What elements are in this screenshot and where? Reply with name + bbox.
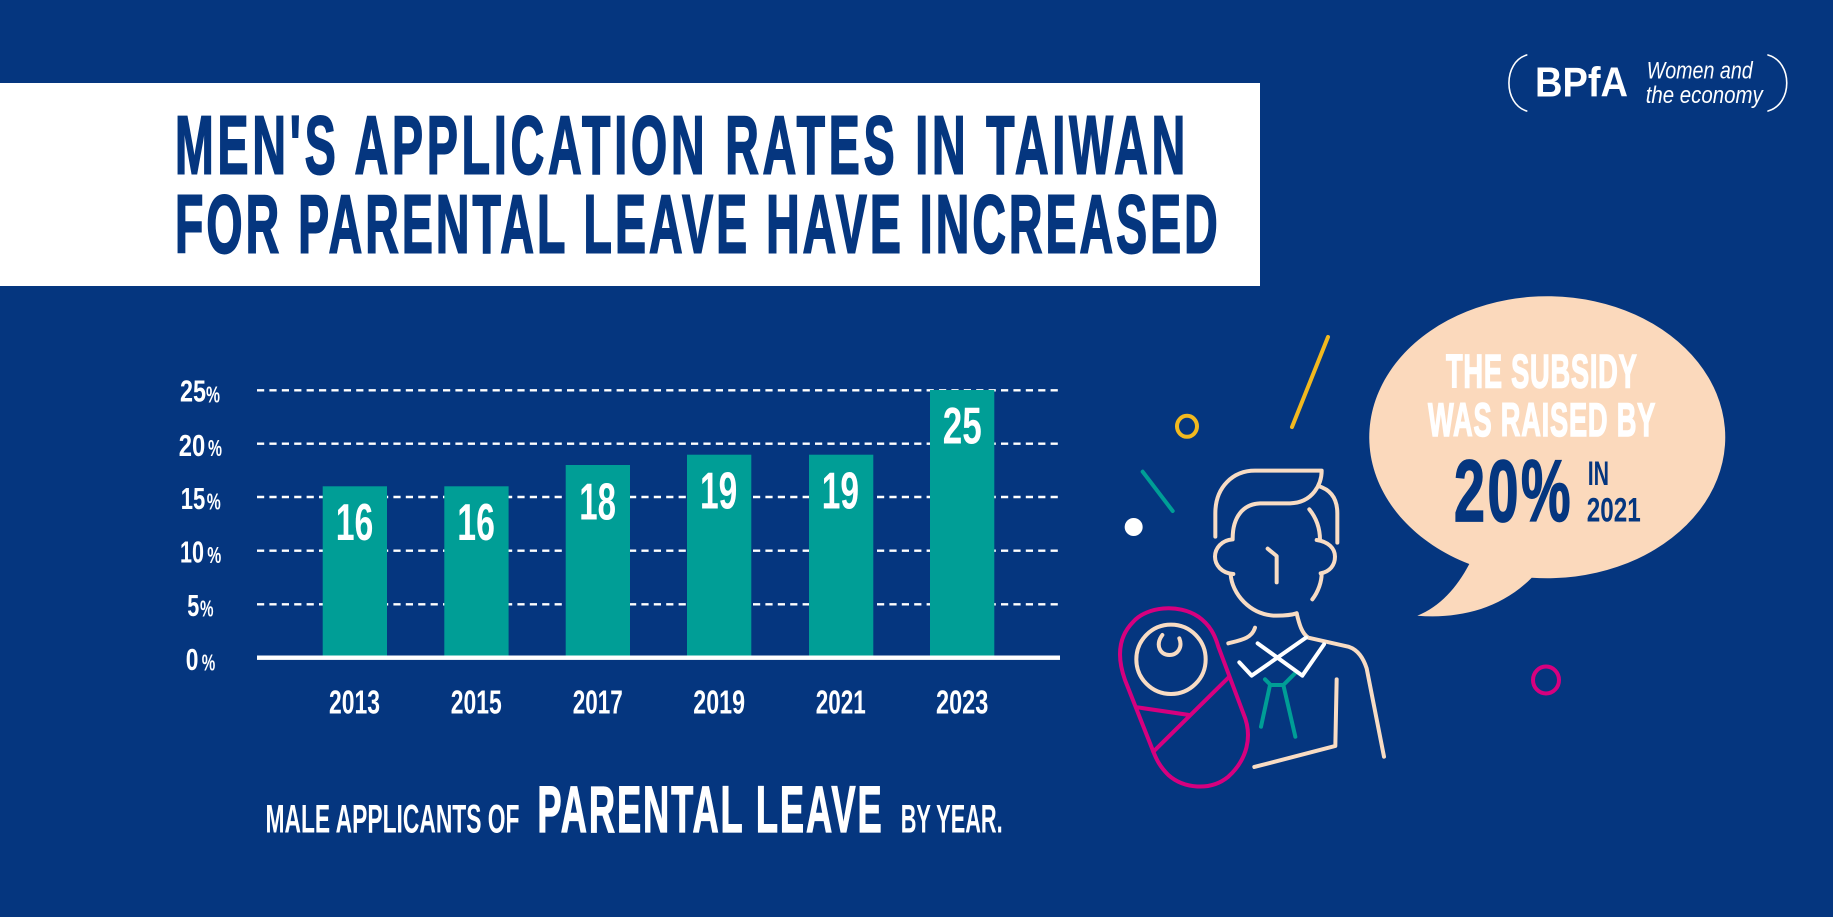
y axis labels: 25 [180, 374, 206, 409]
y axis labels: % [207, 542, 221, 568]
title line 1: MEN'S APPLICATION RATES IN TAIWAN [175, 100, 1185, 192]
title line 2: FOR PARENTAL LEAVE HAVE INCREASED [175, 179, 1218, 271]
decoration: yellow line [1292, 337, 1328, 427]
bubble text: in: IN [1588, 455, 1609, 493]
bar 2015 [444, 486, 509, 656]
bar 2023: 25 [943, 397, 982, 455]
logo: BPfA Women and the economy: BPfA [1535, 59, 1628, 106]
bar 2021 [809, 455, 873, 656]
x axis line [257, 656, 1060, 660]
y axis labels: 5 [187, 588, 199, 623]
bar chart [179, 374, 1060, 721]
y axis labels: % [207, 488, 221, 514]
decoration: white dot [1125, 518, 1143, 536]
y axis labels: % [208, 435, 222, 461]
icon: tie [1261, 673, 1295, 737]
bubble text: was raised by: WAS RAISED BY [1428, 395, 1655, 447]
speech bubble [1369, 296, 1725, 616]
y axis labels: % [206, 382, 220, 408]
bar 2015: 16 [457, 494, 495, 552]
logo: BPfA Women and the economy: the economy [1646, 82, 1764, 109]
title banner [0, 83, 1260, 286]
bar 2021: 19 [822, 462, 859, 520]
icon: shirt collar [1239, 638, 1324, 676]
logo: BPfA Women and the economy: Women and [1647, 57, 1753, 84]
y axis labels: 10 [180, 535, 204, 570]
bar 2017 [566, 465, 630, 656]
bar 2019 [687, 455, 751, 656]
x axis year labels [329, 684, 988, 721]
y axis labels: 15 [181, 481, 205, 516]
bar 2013: 16 [336, 494, 373, 552]
logo: BPfA Women and the economy [1509, 55, 1787, 111]
y axis labels: 20 [179, 428, 205, 463]
chart caption [266, 774, 1003, 847]
chart caption: MALE APPLICANTS OF [266, 798, 520, 842]
chart caption: PARENTAL LEAVE [537, 774, 882, 847]
bar 2023 [930, 390, 994, 656]
x axis year labels: 2023 [936, 684, 988, 721]
y axis labels [179, 374, 222, 677]
y axis labels: % [200, 596, 214, 622]
x axis year labels: 2019 [693, 684, 745, 721]
decoration: yellow ring [1177, 416, 1197, 437]
decoration: magenta ring [1533, 666, 1559, 694]
x axis year labels: 2013 [329, 684, 380, 721]
bubble stat: 20%: 20% [1454, 444, 1570, 540]
icon: man outline [1215, 471, 1384, 767]
icon: swaddled baby [1120, 608, 1248, 787]
bar 2019: 19 [700, 462, 737, 520]
bar 2017: 18 [579, 473, 616, 531]
bar 2013 [323, 486, 387, 656]
illustration: father holding baby [1120, 471, 1384, 787]
x axis year labels: 2015 [451, 684, 502, 721]
decoration: teal line [1143, 472, 1173, 511]
grid lines [257, 390, 1060, 604]
x axis year labels: 2017 [573, 684, 623, 721]
y axis labels: 0 [186, 642, 198, 677]
chart caption: BY YEAR. [901, 798, 1003, 842]
bubble text: the subsidy: THE SUBSIDY [1446, 346, 1637, 398]
bubble text: 2021: 2021 [1587, 492, 1641, 530]
y axis labels: % [202, 650, 215, 676]
x axis year labels: 2021 [816, 684, 866, 721]
